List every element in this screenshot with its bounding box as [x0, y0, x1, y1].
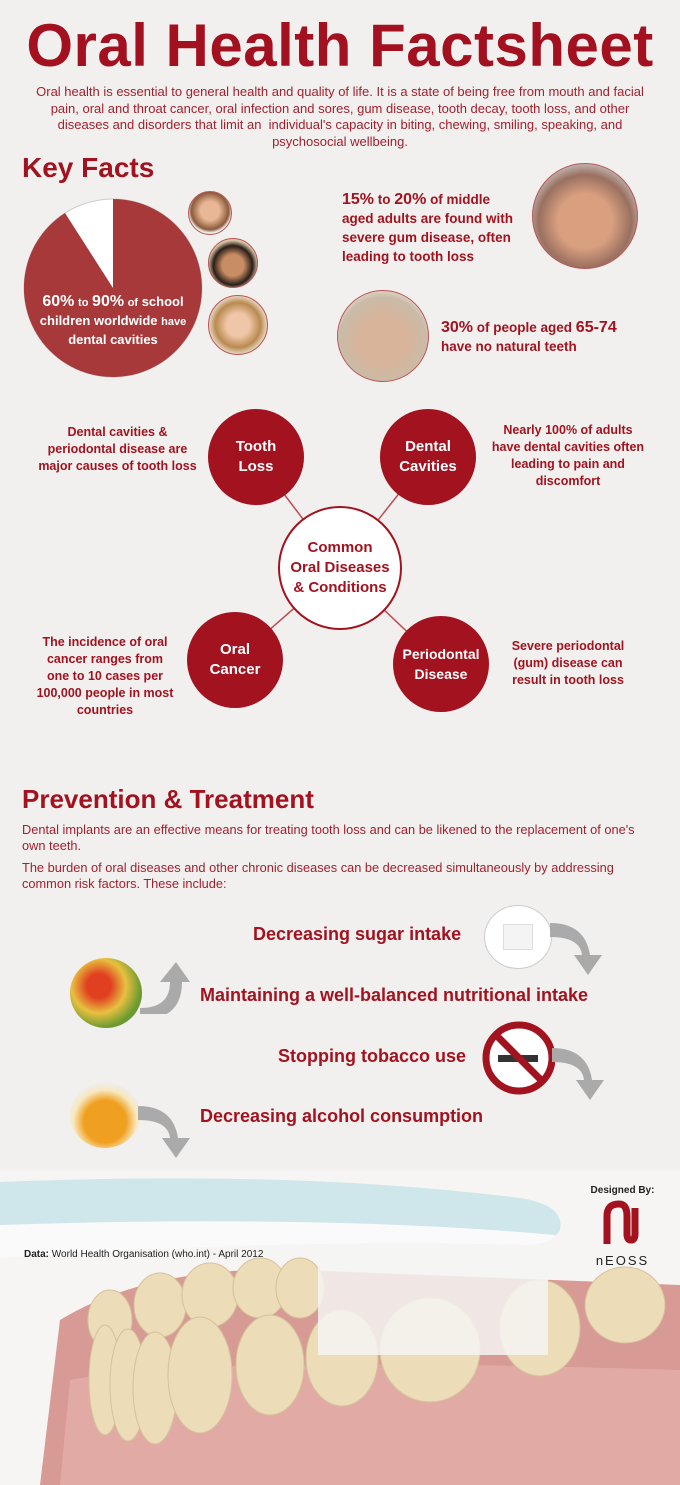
side text: cavities: Nearly 100% of adults	[503, 423, 633, 437]
heading: prevention: Prevention & Treatment	[22, 784, 314, 814]
icon: food	[70, 958, 142, 1028]
side text: oral cancer: countries	[77, 703, 133, 717]
side text: cavities: leading to pain and	[511, 457, 625, 471]
item: alcohol: Decreasing alcohol consumption	[200, 1106, 483, 1126]
node: periodontal disease: Disease	[415, 666, 467, 682]
node: dental cavities: Cavities	[399, 458, 457, 475]
center node	[278, 506, 402, 630]
node: oral cancer: Cancer	[210, 661, 260, 678]
side text: cavities: discomfort	[536, 474, 600, 488]
heading: key facts: Key Facts	[22, 152, 154, 183]
side text: tooth loss: periodontal disease are	[48, 442, 187, 456]
node: periodontal disease: Periodontal	[402, 646, 480, 662]
fact: middle aged: aged adults are found with	[342, 211, 513, 226]
item: sugar: Decreasing sugar intake	[253, 924, 461, 944]
logo: neoss	[591, 1185, 654, 1268]
diagram connectors	[270, 494, 407, 632]
prevention text: Dental implants are an effective means for treating tooth loss and can be likened to the replacement of one's own teeth. The burden of oral diseases and other chronic diseases can be decreased simultaneously by addressing common risk factors. These include:	[22, 822, 635, 891]
arrow: nutrition	[140, 962, 190, 1014]
fact: middle aged: leading to tooth loss	[342, 249, 474, 264]
arrow: tobacco	[552, 1048, 604, 1100]
node: oral cancer	[187, 612, 283, 708]
center node: Oral Diseases	[290, 559, 390, 576]
fact: elderly	[441, 319, 617, 354]
side text: tooth loss: Dental cavities &	[67, 425, 168, 439]
arrow: sugar	[550, 923, 602, 975]
side text: cavities	[492, 423, 644, 488]
node: tooth loss: Loss	[238, 458, 274, 475]
side text: periodontal	[512, 639, 624, 687]
node: oral cancer: Oral	[220, 641, 250, 658]
side text: tooth loss: major causes of tooth loss	[38, 459, 197, 473]
center node: & Conditions	[293, 579, 387, 596]
side text: periodontal: Severe periodontal	[512, 639, 624, 653]
fact: middle aged: 15% to 20% of middle	[342, 191, 490, 208]
node: periodontal disease	[393, 616, 489, 712]
side text: oral cancer	[37, 635, 174, 717]
side text: periodontal: (gum) disease can	[513, 656, 623, 670]
center node: Common	[308, 539, 372, 556]
pie label: 60% to 90% of school children worldwide have dental cavities	[40, 293, 186, 347]
side text: oral cancer: one to 10 cases per	[47, 669, 163, 683]
node: dental cavities	[380, 409, 476, 505]
node: dental cavities: Dental	[405, 438, 451, 455]
logo: neoss: nEOSS	[596, 1253, 649, 1268]
icon: sugar cubes	[484, 905, 552, 969]
pie chart	[24, 198, 202, 378]
icons: children photos	[188, 191, 268, 355]
data source: Data: World Health Organisation (who.int) - April 2012	[24, 1249, 263, 1260]
side text: periodontal: result in tooth loss	[512, 673, 624, 687]
side text: oral cancer: 100,000 people in most	[37, 686, 173, 700]
arrow: alcohol	[138, 1106, 190, 1158]
title: Oral Health Factsheet	[26, 12, 654, 79]
fact: middle aged: severe gum disease, often	[342, 230, 511, 245]
icon: no smoking	[482, 1022, 556, 1094]
icon: beer	[70, 1082, 140, 1148]
logo: neoss: Designed By:	[591, 1185, 654, 1196]
icon: man photo	[532, 163, 638, 269]
item: tobacco: Stopping tobacco use	[278, 1046, 466, 1066]
node: tooth loss: Tooth	[236, 438, 276, 455]
item: nutrition: Maintaining a well-balanced nutritional intake	[200, 985, 588, 1005]
illustration: teeth and toothbrush	[0, 1178, 680, 1485]
fact: elderly: 30% of people aged 65-74	[441, 319, 617, 336]
fact: middle aged	[342, 191, 513, 264]
node: tooth loss	[208, 409, 304, 505]
side text: tooth loss	[38, 425, 197, 473]
side text: oral cancer: cancer ranges from	[47, 652, 163, 666]
side text: cavities: have dental cavities often	[492, 440, 644, 454]
fact: elderly: have no natural teeth	[441, 339, 577, 354]
intro text: Oral health is essential to general health and quality of life. It is a state of being free from mouth and facial pain, oral and throat cancer, oral infection and sores, gum disease, tooth decay, tooth loss, and other diseases and disorders that limit an individual's capacity in biting, chewing, smiling, speaking, and psychosocial wellbeing.	[36, 84, 644, 148]
side text: oral cancer: The incidence of oral	[42, 635, 168, 649]
icon: elderly woman photo	[337, 290, 429, 382]
